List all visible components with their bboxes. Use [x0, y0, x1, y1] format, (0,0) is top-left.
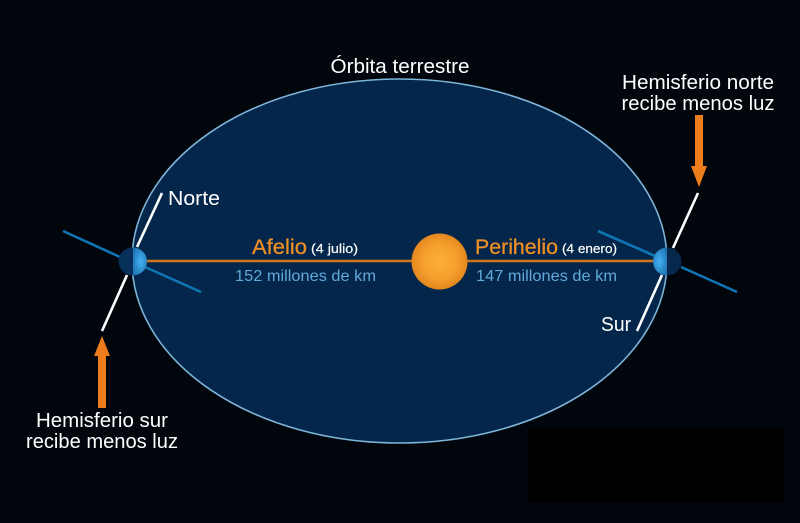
- label: Norte: Norte: [168, 188, 220, 210]
- aphelion title: Afelio: [252, 236, 307, 259]
- label: Sur: Sur: [601, 314, 631, 336]
- left earth orbit tilt line: [63, 231, 201, 292]
- aphelion distance: 152 millones de km: [235, 268, 376, 285]
- aphelion date: (4 julio): [311, 241, 358, 256]
- right earth: perihelion: [598, 193, 737, 331]
- left earth: aphelion: [63, 193, 201, 331]
- callout: southern hemisphere: Hemisferio sur: [36, 410, 168, 432]
- callout: northern hemisphere: recibe menos luz: [622, 93, 774, 115]
- orbit ellipse: [132, 79, 667, 443]
- perihelion title: Perihelio: [475, 236, 558, 259]
- black box: [528, 429, 784, 502]
- orbit title: Órbita terrestre: [330, 55, 470, 78]
- arrow: down: [691, 115, 707, 187]
- callout: southern hemisphere: recibe menos luz: [26, 431, 178, 453]
- right earth orbit tilt line: [598, 231, 737, 292]
- right earth axis: [637, 193, 698, 331]
- distance line: [146, 260, 654, 262]
- arrow: up: [94, 336, 110, 408]
- right earth globe: [654, 248, 682, 276]
- callout: northern hemisphere: [622, 72, 774, 115]
- perihelion date: (4 enero): [562, 241, 617, 256]
- perihelion distance: 147 millones de km: [476, 268, 617, 285]
- sun: [412, 234, 468, 290]
- callout: northern hemisphere: Hemisferio norte: [622, 72, 774, 94]
- aphelion label: [235, 236, 376, 285]
- perihelion label: [475, 236, 617, 285]
- callout: southern hemisphere: [26, 410, 178, 453]
- left earth axis: [102, 193, 162, 331]
- left earth globe: [118, 248, 146, 276]
